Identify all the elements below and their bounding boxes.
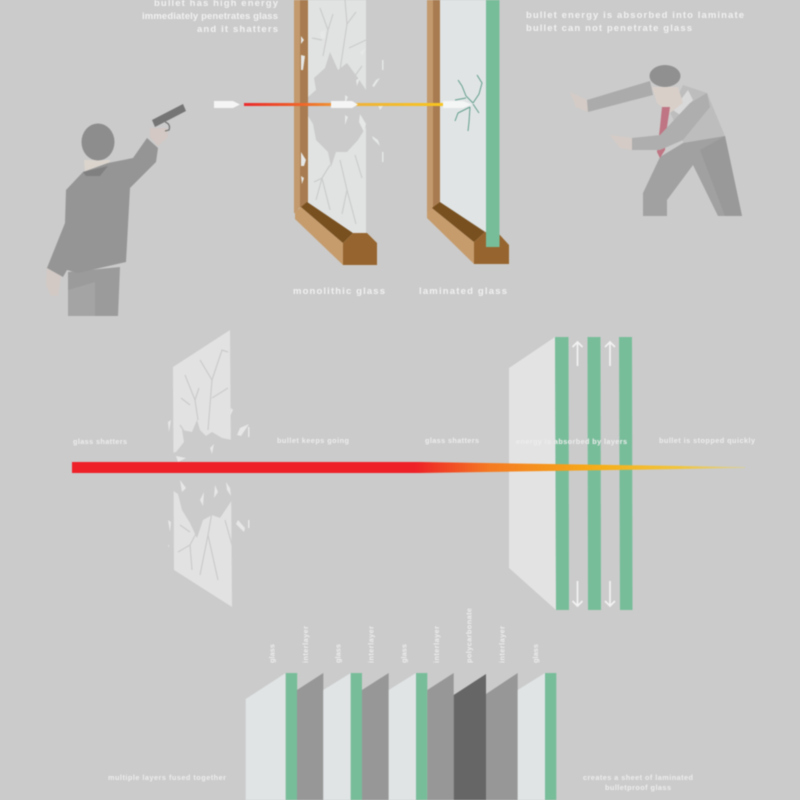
diagram: shattered glass pane [168, 330, 250, 607]
window frame: laminated [427, 0, 509, 264]
shattered glass pane: monolithic [301, 0, 384, 233]
label: glass shatters left: glass shatters [73, 437, 127, 446]
text: monolithic glass description: and it shatters [197, 24, 278, 35]
arrows: energy dispersed along layers [572, 342, 615, 606]
rotated layer labels: interlayer [366, 626, 376, 663]
rotated layer labels: glass [531, 644, 540, 663]
rotated layer labels: polycarbonate [464, 608, 474, 663]
laminate green layers [555, 337, 632, 610]
window frame: monolithic [294, 0, 377, 265]
bullet: stopped in laminated glass [443, 101, 472, 108]
label: creates a sheet of laminated bulletproof glass [583, 773, 693, 792]
text: laminated glass description [526, 10, 744, 34]
label: laminated glass: laminated glass [419, 286, 507, 297]
rotated layer labels: glass [400, 644, 408, 663]
glass pane and green interlayer: laminated [440, 0, 500, 247]
rotated layer labels: interlayer [498, 626, 506, 663]
rotated layer labels: interlayer [301, 626, 310, 663]
figure: shooter with gun [46, 104, 186, 316]
rotated layer labels: glass [268, 644, 276, 663]
text: monolithic glass description: immediately penetrates glass [142, 11, 278, 22]
label: multiple layers fused together: multiple layers fused together [108, 773, 226, 782]
rotated layer labels [268, 608, 540, 663]
label: creates a sheet of laminated bulletproof glass: bulletproof glass [605, 783, 671, 792]
label: bullet keeps going: bullet keeps going [277, 436, 349, 445]
bullet trail [244, 103, 443, 106]
figure: person behind laminated glass [570, 65, 742, 216]
text: laminated glass description: bullet can not penetrate glass [526, 23, 692, 34]
text: laminated glass description: bullet energy is absorbed into laminate [526, 10, 744, 21]
diagram: laminated glass pane [509, 337, 556, 610]
label: glass shatters right: glass shatters [425, 436, 479, 445]
label: creates a sheet of laminated bulletproof glass: creates a sheet of laminated [583, 773, 693, 782]
label: bullet is stopped quickly: bullet is stopped quickly [659, 436, 756, 445]
bullet: passing through monolithic glass [331, 101, 358, 108]
rotated layer labels: interlayer [432, 626, 441, 663]
rotated layer labels: glass [334, 644, 342, 663]
bullet: fired from gun [214, 101, 240, 108]
text: monolithic glass description [142, 0, 279, 35]
bullet path beam [72, 462, 745, 473]
layered bulletproof glass stack [246, 673, 556, 800]
cracks in the laminated glass [455, 75, 482, 131]
label: energy is absorbed by layers: energy is absorbed by layers [516, 437, 627, 446]
label: monolithic glass: monolithic glass [293, 286, 385, 297]
